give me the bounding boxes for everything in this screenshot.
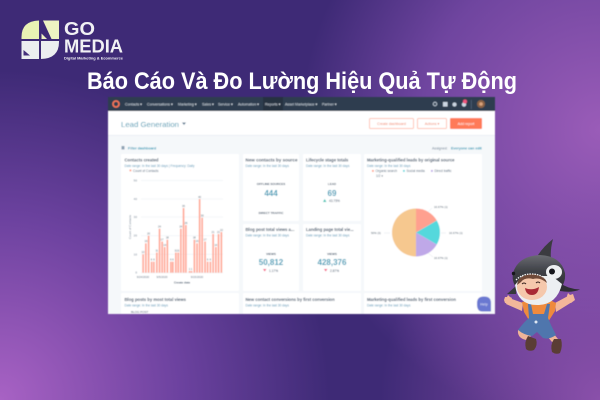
panel: contacts created bar chart: 40 <box>134 197 137 201</box>
navigation bar: Sales ▾ <box>202 102 214 106</box>
panel: contacts created bar chart: Count of Contacts <box>133 169 159 173</box>
panel: contacts created bar chart: Date range: In the last 30 days | Frequency: Daily <box>124 164 195 168</box>
panel: new contacts by source: OFFLINE SOURCES <box>257 182 285 186</box>
panel: blog posts by most total views: Date range: In the last 30 days <box>124 304 168 308</box>
pie <box>392 208 440 256</box>
bar value labels: 24 <box>158 224 161 228</box>
button: Create dashboard <box>370 118 414 128</box>
navigation bar: Marketing ▾ <box>178 102 197 106</box>
legend: Organic search <box>376 169 397 173</box>
pie labels: 16.67% (1) <box>434 205 448 209</box>
orca eye <box>546 265 562 279</box>
panel: new contact conversions <box>243 293 361 314</box>
bar value labels: 11 <box>174 248 178 252</box>
panel: blog post total views: VIEWS <box>266 252 276 256</box>
panel: contacts created bar chart: 50 <box>134 178 137 182</box>
bar value labels: 22 <box>220 228 223 232</box>
fin <box>538 239 553 259</box>
tail flipper <box>560 283 580 292</box>
panel: contacts created bar chart: Create date <box>174 280 190 284</box>
logo wordmark: GO <box>64 19 95 39</box>
bar value labels: 6 <box>151 258 153 262</box>
help button <box>477 296 491 312</box>
bar value labels: 11 <box>177 248 180 252</box>
bar value labels: 40 <box>198 195 202 199</box>
panel: marketing-qualified leads pie chart <box>364 154 482 291</box>
bar value labels: 1 <box>189 267 191 271</box>
page header: Add report <box>458 122 474 126</box>
pie labels: 16.67% (1) <box>434 256 448 260</box>
page header <box>108 111 495 136</box>
bar value labels: 6 <box>210 258 212 262</box>
pie labels <box>371 205 463 260</box>
pie labels: 50% (3) <box>371 231 381 235</box>
bar value labels: 1 <box>191 267 193 271</box>
panel: marketing-qualified leads by first conversion: Date range: In the last 30 days <box>367 304 411 308</box>
bar value labels: 16 <box>145 239 148 243</box>
panel: contacts created bar chart: 0 <box>135 271 137 275</box>
panel: contacts created bar chart: Contacts created <box>124 158 159 162</box>
panel: blog posts by most total views <box>121 293 239 314</box>
panel: landing page total views: Date range: In the last 30 days <box>306 234 350 238</box>
panel: contacts created bar chart: 9/24/2020 <box>137 275 150 279</box>
navigation bar: Contacts ▾ <box>125 102 142 106</box>
button: Create dashboard: Create dashboard <box>377 122 406 126</box>
left flipper <box>507 286 516 294</box>
teeth rim <box>516 274 547 280</box>
button: Actions <box>418 118 446 128</box>
logo: Go Media <box>22 19 123 60</box>
panel: new contacts by source: DIRECT TRAFFIC <box>259 211 284 215</box>
navigation bar: Reports ▾ <box>265 102 281 106</box>
button: Actions: Actions ▾ <box>425 122 439 126</box>
panel: new contact conversions: New contact conversions by first conversion <box>246 297 335 302</box>
legend <box>372 169 452 178</box>
panel: marketing-qualified leads by first conversion: Marketing-qualified leads by first conversion <box>367 297 456 302</box>
bar value labels: 21 <box>212 230 215 234</box>
panel: landing page total views: 428,376 <box>318 258 347 267</box>
button: Add report <box>450 118 482 129</box>
bar value labels: 6 <box>207 258 209 262</box>
panel: new contacts by source <box>243 154 299 221</box>
face <box>517 274 547 300</box>
bar value labels: 11 <box>155 248 159 252</box>
panel: lifecycle stage totals: Date range: In the last 30 days <box>306 164 350 168</box>
panel: lifecycle stage totals: Lifecycle stage totals <box>306 158 349 162</box>
legend: Direct traffic <box>434 169 452 173</box>
panel: lifecycle stage totals: LEAD <box>328 182 337 186</box>
bar value labels: 14 <box>214 243 218 247</box>
panel: contacts created bar chart: 9/5/2020 <box>157 275 168 279</box>
logo wordmark <box>64 19 123 60</box>
panel: contacts created bar chart: Count of Contacts <box>128 214 132 239</box>
bar value labels: 16 <box>196 239 199 243</box>
panel: landing page total views: Landing page total vie... <box>306 227 354 232</box>
logo wordmark: MEDIA <box>64 36 123 56</box>
panel: blog posts by most total views: BLOG POST <box>131 310 149 314</box>
shirt <box>522 300 556 322</box>
navigation bar: Conversations ▾ <box>147 102 173 106</box>
panel: contacts created bar chart: 30 <box>134 215 137 219</box>
help button: Help <box>480 302 488 306</box>
logo wordmark: Digital Marketing & Ecommerce <box>64 56 123 60</box>
bar value labels: 18 <box>193 236 196 240</box>
legs and shoes <box>518 328 531 340</box>
bar value labels: 26 <box>185 221 188 225</box>
assigned link: Everyone can edit <box>451 146 483 150</box>
bar value labels: 24 <box>179 224 183 228</box>
bar value labels: 6 <box>153 258 155 262</box>
bar value labels: 17 <box>161 237 164 241</box>
bar value labels: 14 <box>163 243 167 247</box>
bar value labels: 30 <box>201 214 204 218</box>
assigned link <box>432 146 483 150</box>
mascot: child in orca costume <box>504 239 580 354</box>
panel: lifecycle stage totals <box>303 154 361 221</box>
pie labels: 16.67% (1) <box>449 231 463 235</box>
panel: contacts created bar chart <box>121 154 239 291</box>
legend: Social media <box>406 169 425 173</box>
panel: lifecycle stage totals: 69 <box>328 189 337 198</box>
panel: new contacts by source: 444 <box>264 189 278 198</box>
navigation bar: Service ▾ <box>218 102 233 106</box>
panel: landing page total views: VIEWS <box>327 252 337 256</box>
overalls <box>518 304 556 339</box>
panel: new contacts by source: New contacts by source <box>246 158 298 162</box>
panel: new contacts by source: Date range: In the last 30 days <box>246 164 289 168</box>
assigned link: Assigned: <box>432 146 448 150</box>
bar value labels: 6 <box>172 258 174 262</box>
panel: blog post total views: 1.17% <box>269 269 278 273</box>
bar value labels: 10 <box>142 250 145 254</box>
bar value labels: 35 <box>182 204 185 208</box>
bars <box>142 199 222 273</box>
filter dashboard link: Filter dashboard <box>128 146 156 150</box>
navigation bar: Partner ▾ <box>322 102 337 106</box>
panel: marketing-qualified leads pie chart: Date range: In the last 30 days <box>367 164 411 168</box>
panel: marketing-qualified leads pie chart: Marketing-qualified leads by original source <box>367 158 455 162</box>
panel: landing page total views <box>303 224 361 291</box>
bar value labels: 18 <box>166 236 169 240</box>
bar value labels: 6 <box>170 258 172 262</box>
bar value labels <box>142 195 223 271</box>
navigation bar <box>108 97 495 111</box>
heading: Lead Generation: Lead Generation <box>121 120 179 129</box>
panel: blog post total views: Blog post total views a... <box>246 227 294 232</box>
panel: new contact conversions: Date range: In the last 30 days <box>246 304 289 308</box>
dashboard screenshot <box>108 97 495 314</box>
panel: contacts created bar chart: 20 <box>134 234 137 238</box>
panel: blog posts by most total views: Blog posts by most total views <box>124 297 187 302</box>
logo mark <box>22 20 59 59</box>
panel: blog post total views <box>243 224 299 291</box>
panel: contacts created bar chart: 9/15/2020 <box>191 275 204 279</box>
bar value labels: 21 <box>217 230 220 234</box>
bar value labels: 17 <box>204 237 207 241</box>
navigation bar: Automation ▾ <box>238 102 259 106</box>
legend: 1/2 ▾ <box>376 174 383 178</box>
white hood rim <box>515 276 562 305</box>
panel: lifecycle stage totals: 43.75% <box>329 199 340 203</box>
panel: marketing-qualified leads by first conversion <box>364 293 482 314</box>
bar value labels: 20 <box>147 232 151 236</box>
panel: blog post total views: Date range: In the last 30 days <box>246 234 289 238</box>
arms <box>506 298 523 311</box>
panel: blog post total views: 50,812 <box>259 258 284 267</box>
navigation bar: Asset Marketplace ▾ <box>285 102 318 106</box>
mouth <box>525 287 539 295</box>
nav icons <box>433 100 485 109</box>
orca head <box>513 255 565 291</box>
title: Báo Cáo Và Đo Lường Hiệu Quả Tự Động <box>87 68 517 95</box>
panel: landing page total views: 2.87% <box>330 269 339 273</box>
panel: contacts created bar chart: 10 <box>134 252 137 256</box>
